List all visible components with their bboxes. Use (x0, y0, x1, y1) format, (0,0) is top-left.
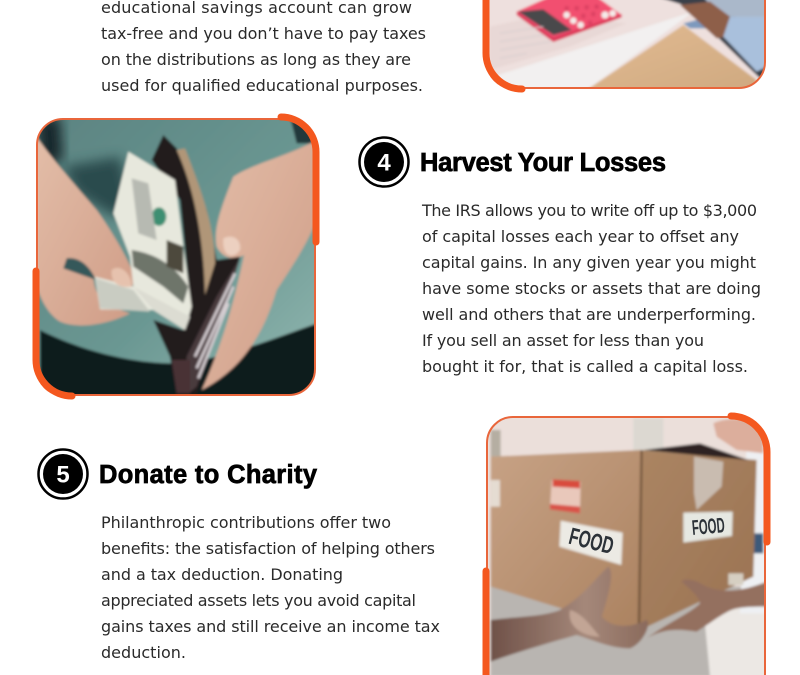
heading: Donate to Charity: Donate to Charity (99, 461, 318, 489)
frame: thin photo border (487, 0, 765, 88)
heading: Harvest Your Losses: Harvest Your Losses (420, 149, 666, 177)
text block: philanthropic contributions (101, 513, 440, 662)
badge: number 5 (38, 450, 88, 498)
frame: thin photo border (487, 417, 765, 675)
text block: capital losses: bought it for, that is called a capital loss. (422, 357, 748, 376)
text block: capital losses: of capital losses each year to offset any (422, 227, 739, 246)
text block: capital losses: If you sell an asset for less than you (422, 331, 704, 350)
text block: philanthropic contributions: Philanthropic contributions offer two (101, 513, 391, 532)
photo: hands holding wallet with cash (36, 117, 317, 397)
badge: number 5: 5 (56, 462, 70, 488)
text block: educational savings account: on the distributions as long as they are (101, 50, 411, 69)
text block: philanthropic contributions: appreciated assets lets you avoid capital (101, 591, 416, 610)
text block: capital losses: capital gains. In any given year you might (422, 253, 756, 272)
text block: philanthropic contributions: benefits: the satisfaction of helping others (101, 539, 435, 558)
text block: capital losses: have some stocks or assets that are doing (422, 279, 761, 298)
accent: top-right thick arc (281, 117, 316, 242)
accent: top-right thick arc (731, 416, 767, 542)
text block: philanthropic contributions: deduction. (101, 643, 186, 662)
photo: hands passing a food box (486, 416, 767, 675)
label text: FOOD on box front: FOOD (566, 523, 616, 560)
label text: FOOD on box side: FOOD (691, 513, 726, 540)
text block: capital losses: well and others that are underperforming. (422, 305, 756, 324)
text block: philanthropic contributions: and a tax deduction. Donating (101, 565, 343, 584)
photo: calculator and paperwork (482, 0, 766, 92)
text block: educational savings account: tax-free and you don’t have to pay taxes (101, 24, 426, 43)
text block: educational savings account (101, 0, 426, 95)
text block: philanthropic contributions: gains taxes and still receive an income tax (101, 617, 440, 636)
text block: capital losses (421, 201, 761, 376)
badge: number 4: 4 (377, 150, 391, 176)
accent: thick corner arc (486, 0, 522, 89)
accent: left thick bar (482, 571, 490, 675)
text block: educational savings account: used for qualified educational purposes. (101, 76, 423, 95)
accent: bottom-left thick arc (36, 271, 72, 396)
text block: capital losses: The IRS allows you to write off up to $3,000 (421, 201, 757, 220)
badge: number 4 (360, 138, 408, 186)
frame: thin photo border (37, 119, 315, 395)
